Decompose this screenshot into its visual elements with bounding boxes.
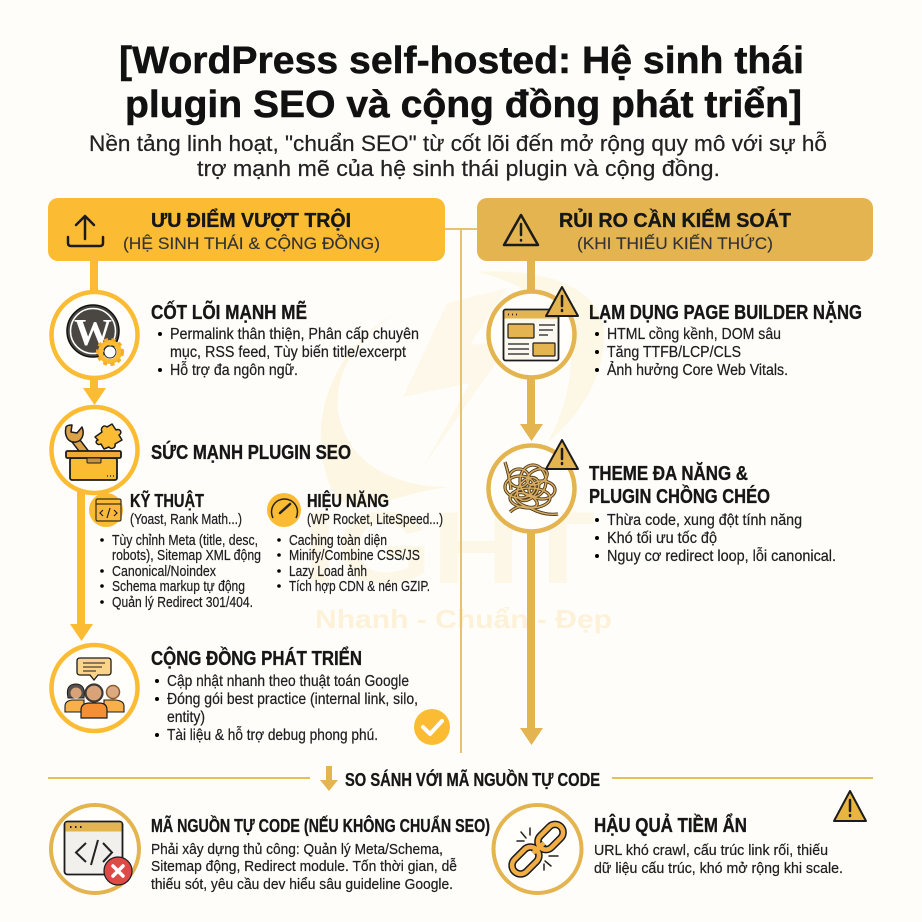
icon: check badge	[414, 709, 450, 745]
text block: community: Tài liệu & hỗ trợ debug phong phú.	[167, 727, 378, 744]
text block: community: entity)	[167, 709, 205, 726]
panel: risks header: (KHI THIẾU KIẾN THỨC)	[577, 234, 773, 253]
watermark logo: IGHT	[303, 491, 595, 605]
text block: custom code: Phải xây dựng thủ công: Quản lý Meta/Schema,	[151, 842, 443, 858]
text block: technical	[100, 490, 261, 611]
right column connectors	[520, 261, 543, 745]
text block: consequences: URL khó crawl, cấu trúc link rối, thiếu	[594, 843, 828, 859]
text block: consequences: HẬU QUẢ TIỀM ẨN	[594, 813, 747, 837]
text block: technical: Tùy chỉnh Meta (title, desc,	[112, 533, 258, 549]
panel: advantages header: ƯU ĐIỂM VƯỢT TRỘI	[151, 208, 351, 232]
text block: custom code: thiếu sót, yêu cầu dev hiểu sâu guideline Google.	[151, 877, 453, 893]
icon: wordpress with gear	[52, 292, 138, 378]
text block: page builder: Tăng TTFB/LCP/CLS	[607, 344, 741, 361]
heading: plugin power: SỨC MẠNH PLUGIN SEO	[151, 440, 351, 464]
text block: custom code	[151, 815, 490, 893]
text block: custom code: MÃ NGUỒN TỰ CODE (NẾU KHÔNG CHUẨN SEO)	[151, 815, 490, 836]
text block: core strengths: Hỗ trợ đa ngôn ngữ.	[170, 362, 298, 379]
text block: technical: KỸ THUẬT	[130, 490, 204, 511]
title: [WordPress self-hosted: Hệ sinh thái	[119, 40, 804, 82]
title: plugin SEO và cộng đồng phát triển]	[125, 84, 802, 126]
icon: upload	[68, 216, 103, 246]
text block: multipurpose theme: THEME ĐA NĂNG &	[589, 462, 748, 485]
icon: page builder window with warning	[488, 287, 578, 378]
text block: performance: Tích hợp CDN & nén GZIP.	[289, 579, 430, 595]
text block: multipurpose theme: Nguy cơ redirect loop, lỗi canonical.	[607, 548, 836, 565]
panel: risks header: RỦI RO CẦN KIỂM SOÁT	[559, 208, 791, 232]
icon: tangled rope with warning	[488, 440, 578, 532]
text block: consequences: dữ liệu cấu trúc, khó mở rộng khi scale.	[594, 861, 843, 877]
text block: technical: Schema markup tự động	[112, 579, 245, 595]
comparison divider heading	[48, 766, 873, 791]
text block: performance: Caching toàn diện	[289, 533, 387, 549]
text block: technical: Quản lý Redirect 301/404.	[112, 595, 253, 611]
text block: technical: robots), Sitemap XML động	[112, 548, 261, 564]
text block: technical: (Yoast, Rank Math...)	[130, 512, 242, 528]
text block: page builder	[589, 301, 862, 379]
text block: multipurpose theme: Khó tối ưu tốc độ	[607, 530, 717, 547]
icon: warning triangle	[834, 791, 866, 821]
icon: code window with error	[51, 805, 139, 893]
subtitle: trợ mạnh mẽ của hệ sinh thái plugin và cộng đồng.	[197, 156, 720, 181]
icon: warning	[504, 215, 538, 245]
text block: custom code: Sitemap động, Redirect module. Tốn thời gian, dễ	[151, 858, 457, 875]
text block: multipurpose theme	[589, 462, 836, 565]
icon: wordpress with gear: W	[74, 312, 112, 354]
text block: community	[151, 646, 418, 744]
text block: consequences	[594, 813, 843, 877]
left column connectors	[70, 261, 106, 641]
panel: risks header	[477, 198, 873, 261]
icon: speed gauge	[267, 493, 301, 527]
icon: broken chain	[494, 805, 582, 893]
text block: multipurpose theme: Thừa code, xung đột tính năng	[607, 512, 802, 529]
watermark logo	[303, 271, 612, 634]
panel: advantages header: (HỆ SINH THÁI & CỘNG ĐỒNG)	[123, 234, 380, 253]
text block: community: CỘNG ĐỒNG PHÁT TRIỂN	[151, 646, 362, 670]
text block: community: Đóng gói best practice (internal link, silo,	[167, 691, 418, 708]
text block: page builder: HTML cồng kềnh, DOM sâu	[607, 326, 781, 343]
panel: advantages header	[48, 198, 445, 261]
text block: core strengths: Permalink thân thiện, Phân cấp chuyên	[170, 326, 419, 343]
icon: toolbox and puzzle	[52, 407, 138, 493]
title	[119, 40, 804, 126]
text block: performance: HIỆU NĂNG	[307, 490, 389, 511]
text block: community: Cập nhật nhanh theo thuật toán Google	[167, 673, 409, 690]
center divider	[445, 229, 477, 753]
subtitle	[89, 131, 827, 181]
text block: page builder: LẠM DỤNG PAGE BUILDER NẶNG	[589, 301, 862, 324]
text block: performance: Minify/Combine CSS/JS	[289, 548, 420, 564]
text block: core strengths: mục, RSS feed, Tùy biến title/excerpt	[170, 344, 407, 361]
watermark logo: Nhanh - Chuẩn - Đẹp	[315, 604, 612, 634]
icon: code window	[89, 493, 123, 527]
text block: technical: Canonical/Noindex	[112, 564, 217, 580]
subtitle: Nền tảng linh hoạt, "chuẩn SEO" từ cốt lõi đến mở rộng quy mô với sự hỗ	[89, 131, 827, 156]
text block: performance: (WP Rocket, LiteSpeed...)	[307, 512, 443, 528]
text block: performance: Lazy Load ảnh	[289, 564, 367, 580]
text block: core strengths	[151, 300, 419, 379]
comparison divider heading: SO SÁNH VỚI MÃ NGUỒN TỰ CODE	[345, 769, 600, 790]
text block: multipurpose theme: PLUGIN CHỒNG CHÉO	[589, 484, 770, 508]
text block: performance	[277, 490, 443, 595]
text block: page builder: Ảnh hưởng Core Web Vitals.	[607, 362, 788, 379]
icon: community people	[52, 645, 138, 731]
text block: core strengths: CỐT LÕI MẠNH MẼ	[151, 300, 307, 324]
